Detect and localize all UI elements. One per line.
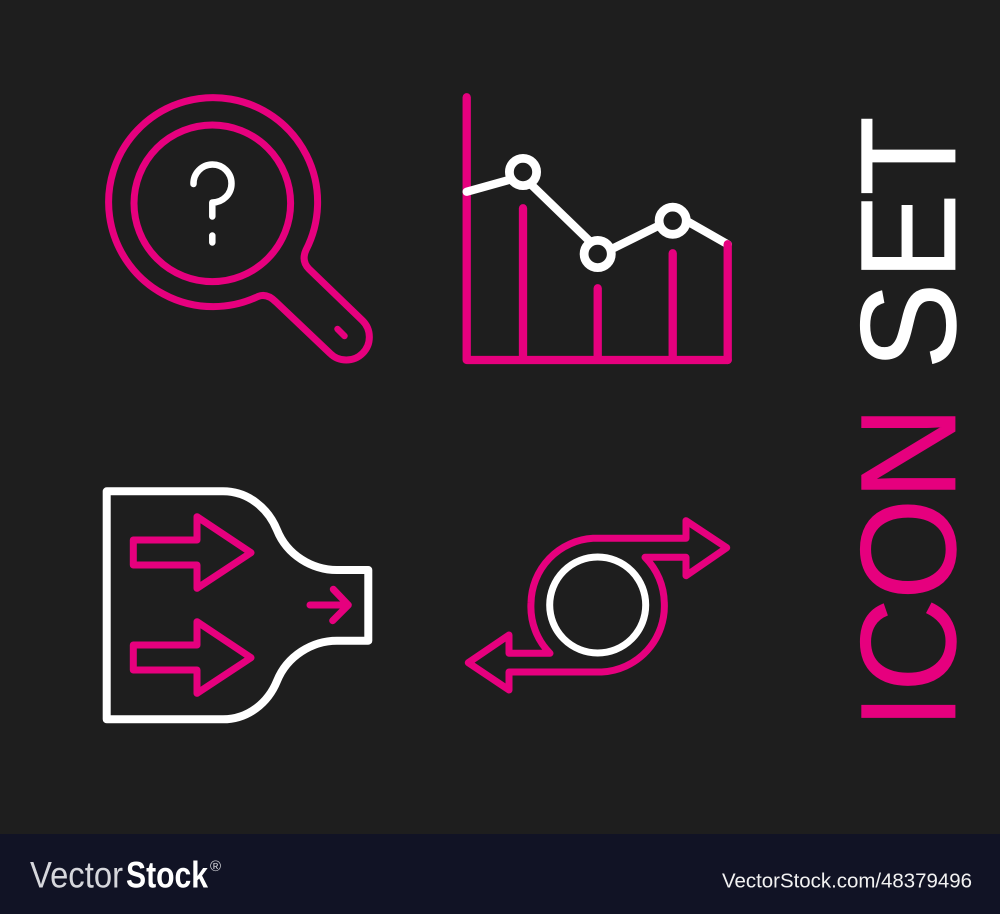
magnifier outer body and handle xyxy=(109,98,369,360)
footer logo: VectorStock: Stock xyxy=(126,854,208,896)
small exit arrow xyxy=(310,589,348,621)
handle slot xyxy=(338,329,344,336)
footer logo: VectorStock xyxy=(30,854,208,896)
lower large arrow xyxy=(133,622,251,693)
word: ICON: ICON xyxy=(834,406,985,729)
chart right bar xyxy=(724,244,732,360)
upper large arrow xyxy=(133,517,251,588)
bottle outline xyxy=(107,491,368,719)
footer logo: VectorStock: Vector xyxy=(30,854,123,896)
swirl double arrow xyxy=(468,521,727,690)
trend line xyxy=(467,176,728,256)
vertical title: ICON SET xyxy=(834,116,985,729)
icon: magnifying glass with question mark xyxy=(109,98,369,360)
trend data points xyxy=(509,158,686,268)
icon: line chart over bars xyxy=(467,97,728,360)
footer registered mark: ® xyxy=(210,858,221,875)
footer bar xyxy=(0,834,1000,914)
question mark xyxy=(193,165,231,242)
centre circle xyxy=(550,557,646,653)
footer image id: VectorStock.com/48379496 xyxy=(722,869,972,892)
magnifier inner lens xyxy=(134,125,291,282)
word: SET: SET xyxy=(834,116,985,369)
icon: bottleneck with arrows xyxy=(107,491,368,719)
chart axes and bars xyxy=(467,97,728,360)
icon: circular flow with two arrows xyxy=(468,521,727,690)
